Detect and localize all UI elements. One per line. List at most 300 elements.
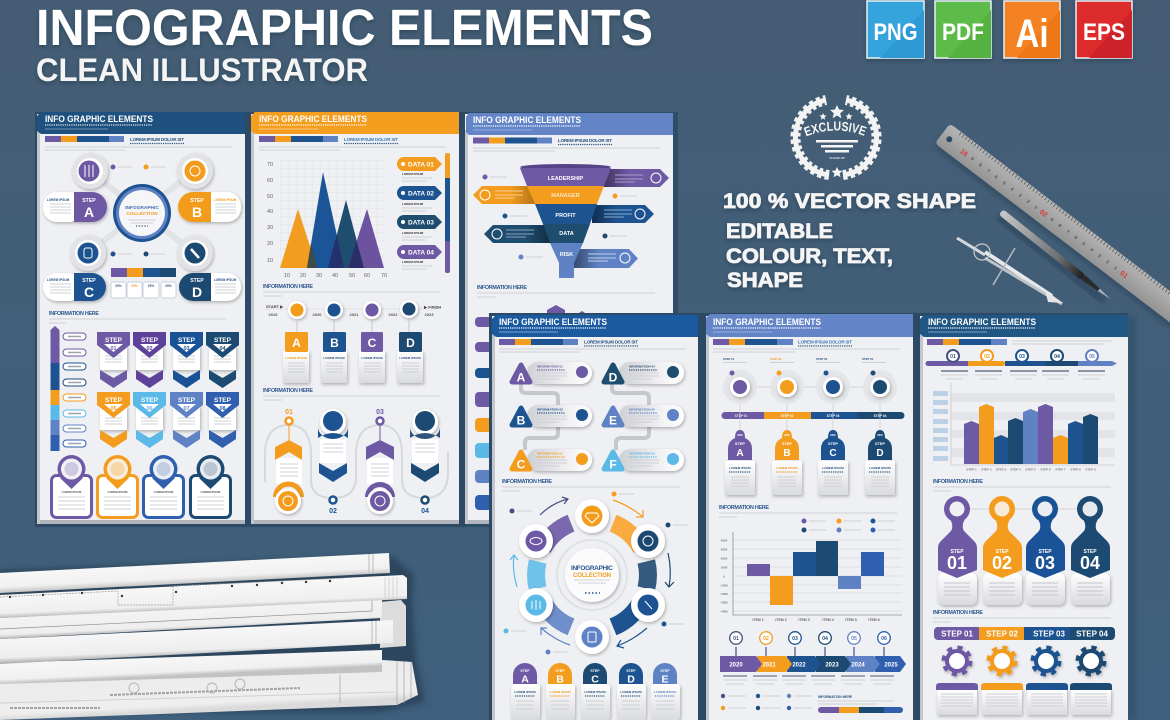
timeline with icons: 2021 bbox=[350, 312, 359, 317]
flow 02: 02 bbox=[329, 508, 337, 515]
connectors bbox=[521, 384, 649, 450]
year circles: 01 bbox=[733, 636, 739, 642]
tab D: D bbox=[627, 674, 635, 686]
year arrow band bbox=[720, 656, 906, 672]
gear dark bbox=[1078, 648, 1104, 674]
data 02 bbox=[397, 186, 442, 211]
timeline with icons bbox=[265, 300, 441, 332]
snake flow bbox=[265, 409, 448, 515]
positive negative bar chart: 1000 bbox=[721, 566, 728, 570]
heading: information here: INFORMATION HERE bbox=[502, 479, 552, 485]
ruler: 4 bbox=[1010, 186, 1015, 192]
tab B bbox=[546, 663, 575, 720]
ruler: 02 bbox=[1038, 209, 1048, 219]
year arrow band: 2022 bbox=[792, 662, 806, 668]
x axis labels: 40 bbox=[332, 273, 338, 279]
header bbox=[492, 315, 698, 337]
step cards row 2 bbox=[97, 392, 239, 448]
arrow bar chart: STEP 4 bbox=[1010, 468, 1021, 472]
x axis labels: 10 bbox=[284, 273, 290, 279]
row E: E bbox=[609, 414, 617, 428]
heading: information here: INFORMATION HERE bbox=[263, 284, 313, 290]
card C bbox=[359, 332, 385, 383]
positive negative bar chart: ITEM 5 bbox=[845, 618, 857, 622]
funnel bullets bbox=[482, 174, 637, 260]
tab C: LOREM IPSUM bbox=[584, 690, 606, 694]
funnel: LEADERSHIP bbox=[548, 176, 584, 182]
tag step 01: STEP bbox=[950, 549, 964, 555]
flow 02 bbox=[318, 409, 348, 515]
arrow bar chart: STEP 3 bbox=[996, 468, 1006, 472]
timeline with icons: 2019 bbox=[269, 312, 278, 317]
colour key: LOREM IPSUM DOLOR SIT bbox=[798, 340, 852, 344]
tab A: STEP bbox=[520, 669, 530, 673]
row B bbox=[512, 405, 592, 428]
step 05 bbox=[97, 392, 130, 448]
tag C: STEP bbox=[828, 442, 838, 446]
roll 6 bbox=[0, 660, 418, 720]
tab A: LOREM IPSUM bbox=[514, 690, 536, 694]
panel 4: process sheet bbox=[489, 313, 703, 720]
row C bbox=[512, 449, 592, 472]
row F bbox=[604, 449, 684, 472]
ruler: 5 bbox=[1002, 180, 1007, 186]
arrow: periwinkle bbox=[573, 249, 638, 268]
tag D bbox=[865, 430, 895, 495]
tag step 03: STEP bbox=[1038, 549, 1052, 555]
panel 6: step infographic sheet bbox=[917, 313, 1136, 720]
card D bbox=[397, 332, 423, 383]
cycle bullets bbox=[504, 492, 688, 654]
ruler: 5 bbox=[1081, 241, 1087, 247]
positive negative bar chart: ITEM 3 bbox=[798, 618, 810, 622]
tab E bbox=[651, 663, 680, 720]
flow 04: 04 bbox=[421, 508, 429, 515]
ruler: 7 bbox=[1065, 229, 1071, 235]
positive negative bar chart: ITEM 6 bbox=[868, 618, 880, 622]
top timeline: 03 bbox=[1019, 354, 1025, 360]
step 08: 08 bbox=[219, 406, 226, 412]
row B: INFORMATION 02 bbox=[537, 408, 563, 412]
data 02: DATA 02 bbox=[408, 190, 434, 198]
tag D: D bbox=[876, 448, 884, 459]
header: INFO GRAPHIC ELEMENTS bbox=[713, 317, 821, 328]
arrow: dark bbox=[484, 225, 552, 243]
step B: B bbox=[192, 204, 202, 220]
line: 100 % vector shape: 100 % VECTOR SHAPE bbox=[723, 190, 976, 213]
pin cards bbox=[52, 455, 230, 518]
top timeline: 02 bbox=[984, 354, 990, 360]
y axis labels: 70 bbox=[267, 162, 273, 168]
year arrow band: 2024 bbox=[851, 662, 865, 668]
left tabs bbox=[475, 317, 492, 510]
header bbox=[37, 112, 245, 134]
tab A bbox=[511, 663, 540, 720]
year circles: 05 bbox=[851, 636, 857, 642]
arrow bar chart: STEP 7 bbox=[1055, 468, 1066, 472]
gear caption cards bbox=[936, 683, 1112, 715]
tag B: LOREM IPSUM bbox=[776, 466, 798, 470]
tag B bbox=[772, 430, 802, 495]
badge: EPS bbox=[1076, 1, 1132, 58]
heading: information here: INFORMATION HERE bbox=[49, 311, 99, 317]
ruler: 2 bbox=[1105, 259, 1111, 265]
tab D: LOREM IPSUM bbox=[620, 690, 642, 694]
legend bullets bbox=[110, 164, 165, 256]
step 05: STEP bbox=[105, 397, 123, 404]
funnel: PROFIT bbox=[555, 213, 576, 219]
tab C bbox=[581, 663, 610, 720]
arrow bar chart: STEP 2 bbox=[981, 468, 992, 472]
heading: information here 2 bbox=[933, 610, 1111, 622]
step A: LOREM IPSUM bbox=[47, 198, 70, 202]
card A: LOREM IPSUM bbox=[285, 356, 307, 360]
heading: information here 2: INFORMATION HERE bbox=[263, 388, 313, 394]
pin card orange bbox=[98, 455, 138, 518]
top timeline: 05 bbox=[1089, 354, 1095, 360]
central hub bbox=[70, 153, 213, 271]
badge: PNG bbox=[867, 1, 924, 58]
step tags bbox=[725, 430, 895, 495]
sub heading: CLEAN ILLUSTRATOR bbox=[36, 52, 368, 88]
tab C: STEP bbox=[590, 669, 600, 673]
line: colour text: COLOUR, TEXT, bbox=[726, 245, 893, 268]
positive negative bar chart: ITEM 4 bbox=[822, 618, 834, 622]
header: INFO GRAPHIC ELEMENTS bbox=[259, 114, 367, 125]
data 02: LOREM IPSUM bbox=[402, 202, 424, 206]
triangles bbox=[280, 172, 384, 268]
top timeline: 01 bbox=[950, 354, 956, 360]
arrow: blue bbox=[592, 205, 654, 223]
triangle chart bbox=[267, 156, 387, 279]
ruler: 9 bbox=[1049, 217, 1055, 222]
row D: D bbox=[609, 370, 618, 384]
stars bbox=[819, 105, 852, 177]
data 01: LOREM IPSUM bbox=[402, 172, 424, 176]
positive negative bar chart bbox=[720, 532, 902, 622]
letter cards bbox=[283, 332, 423, 383]
badge: PDF bbox=[935, 1, 991, 58]
colour key bbox=[499, 339, 686, 352]
positive negative bar chart: 3000 bbox=[721, 548, 728, 552]
step 06: 06 bbox=[146, 406, 153, 412]
pin card blue bbox=[144, 455, 184, 518]
row F: F bbox=[609, 458, 617, 472]
tag B: B bbox=[783, 448, 791, 459]
header: INFO GRAPHIC ELEMENTS bbox=[473, 115, 581, 126]
gear orange bbox=[989, 648, 1015, 674]
step 04: STEP bbox=[214, 337, 232, 344]
roll 2 bbox=[0, 575, 407, 618]
step 02: 02 bbox=[146, 346, 153, 352]
panel 5: bar chart sheet bbox=[703, 313, 917, 720]
tag C: LOREM IPSUM bbox=[822, 466, 844, 470]
shadow bbox=[0, 556, 425, 712]
funnel: RISK bbox=[560, 252, 573, 258]
ruler: 8 bbox=[978, 162, 983, 168]
step 05: 05 bbox=[110, 406, 117, 412]
tag A: A bbox=[736, 448, 744, 459]
card A bbox=[283, 332, 309, 383]
cycle arrows bbox=[510, 497, 674, 648]
gear blue bbox=[1033, 648, 1059, 674]
nodes bbox=[519, 499, 665, 654]
ruler: 4 bbox=[1089, 247, 1095, 253]
positive negative bar chart: -2000 bbox=[720, 592, 728, 596]
small percent bar: 20% bbox=[165, 284, 172, 288]
caption 4 bbox=[1070, 683, 1112, 715]
flow 03: 03 bbox=[376, 409, 384, 416]
data 03: LOREM IPSUM bbox=[402, 231, 424, 235]
tab D: STEP bbox=[626, 669, 636, 673]
row F: INFORMATION 06 bbox=[629, 452, 655, 456]
heading: information here bbox=[263, 284, 440, 296]
tag A: 20% bbox=[737, 433, 743, 437]
year arrow band: 2025 bbox=[884, 662, 898, 668]
ring segments bbox=[536, 523, 648, 627]
funnel: DATA bbox=[559, 231, 574, 237]
card B: LOREM IPSUM bbox=[323, 356, 345, 360]
step C bbox=[43, 273, 106, 301]
funnel bbox=[520, 164, 611, 278]
ring steps: STEP 04 bbox=[862, 357, 874, 361]
heading: information here: INFORMATION HERE bbox=[719, 505, 769, 511]
badge: EPS: EPS bbox=[1083, 19, 1125, 46]
colour key: LOREM IPSUM DOLOR SIT bbox=[584, 340, 638, 344]
card C: LOREM IPSUM bbox=[361, 356, 383, 360]
heading: information here 2 bbox=[263, 388, 440, 400]
panel 1: step diagram sheet bbox=[35, 112, 250, 527]
pin card blue: LOREM IPSUM bbox=[154, 490, 174, 494]
ruler: 8 bbox=[1057, 223, 1063, 229]
y axis labels: 10 bbox=[267, 258, 273, 264]
positive negative bar chart: 2000 bbox=[721, 556, 728, 560]
top timeline bbox=[926, 350, 1117, 379]
step bar: STEP 03 bbox=[827, 414, 840, 418]
year circles: 02 bbox=[763, 636, 769, 642]
tab C: C bbox=[591, 674, 599, 686]
card B bbox=[321, 332, 347, 383]
year arrow band: 2020 bbox=[729, 662, 743, 668]
ring steps bbox=[723, 357, 897, 404]
x axis labels: 60 bbox=[364, 273, 370, 279]
timeline with icons: ▶ FINISH bbox=[423, 304, 441, 310]
row D bbox=[604, 362, 684, 384]
year captions bbox=[723, 676, 894, 684]
heading: information here: INFORMATION HERE bbox=[933, 479, 983, 485]
row E: INFORMATION 05 bbox=[629, 408, 655, 412]
tab E: STEP bbox=[660, 669, 670, 673]
step bar: STEP 02 bbox=[781, 414, 794, 418]
gears bbox=[944, 648, 1104, 674]
hub circle: COLLECTION bbox=[126, 211, 158, 217]
heading: information here bbox=[719, 505, 897, 517]
tab E: E bbox=[661, 674, 669, 686]
circular cycle diagram bbox=[504, 492, 688, 654]
arrow bar chart: STEP 9 bbox=[1085, 468, 1096, 472]
year circles: 04 bbox=[822, 636, 828, 642]
card D: LOREM IPSUM bbox=[399, 356, 421, 360]
vector shape text bbox=[723, 190, 976, 292]
step band: STEP 01 bbox=[941, 630, 973, 638]
positive negative bar chart: 0 bbox=[723, 574, 725, 578]
ruler: 1 bbox=[1034, 205, 1039, 210]
file format badges bbox=[867, 1, 1132, 58]
info rows bbox=[512, 362, 684, 472]
step A: A bbox=[84, 204, 94, 220]
header bbox=[706, 314, 913, 337]
pin card dark: LOREM IPSUM bbox=[201, 490, 221, 494]
positive negative bar chart: -3000 bbox=[720, 600, 728, 604]
y axis labels: 20 bbox=[267, 241, 273, 247]
badge: Ai: Ai bbox=[1016, 12, 1048, 56]
blueprint rolls bbox=[0, 553, 425, 720]
colour key bbox=[927, 339, 1112, 345]
badge stripes bbox=[816, 140, 858, 152]
ruler: 1 bbox=[1113, 265, 1119, 271]
y axis labels: 50 bbox=[267, 194, 273, 200]
tag step 02: STEP bbox=[995, 549, 1009, 555]
card D: D bbox=[406, 336, 415, 350]
small percent bar: 20% bbox=[148, 284, 154, 288]
timeline with icons: 2020 bbox=[313, 312, 322, 317]
colour key: LOREM IPSUM DOLOR SIT bbox=[558, 138, 612, 143]
step 07: STEP bbox=[178, 397, 196, 404]
ruler: 3 bbox=[1018, 192, 1023, 198]
colour key bbox=[713, 339, 900, 352]
ruler: 7 bbox=[986, 168, 991, 174]
ring steps: STEP 02 bbox=[770, 357, 782, 361]
node: dark bbox=[177, 235, 213, 271]
panel 2: chart sheet bbox=[249, 112, 465, 527]
positive negative bar chart: ITEM 2 bbox=[775, 618, 787, 622]
step 04 bbox=[206, 332, 239, 388]
big step tags bbox=[938, 496, 1110, 605]
row B: B bbox=[517, 414, 526, 428]
caption 3 bbox=[1026, 683, 1068, 715]
arrow bar chart: STEP 6 bbox=[1040, 468, 1051, 472]
header bbox=[251, 112, 459, 134]
tag A: LOREM IPSUM bbox=[729, 466, 751, 470]
data tags bbox=[397, 157, 442, 269]
row C: C bbox=[517, 458, 526, 472]
node icons bbox=[530, 513, 653, 642]
caption 1 bbox=[936, 683, 978, 715]
ring steps: STEP 03 bbox=[816, 357, 828, 361]
step bar: STEP 04 bbox=[874, 414, 887, 418]
tab D bbox=[617, 663, 646, 720]
ruler: 2 bbox=[1026, 198, 1031, 204]
tag C: C bbox=[829, 448, 837, 459]
ruler: 3 bbox=[1097, 253, 1103, 259]
step 03 bbox=[170, 332, 203, 388]
step 01: STEP bbox=[105, 337, 123, 344]
card C: C bbox=[368, 336, 377, 350]
back sheet ends bbox=[380, 600, 406, 648]
tab B: LOREM IPSUM bbox=[549, 690, 571, 694]
arrow bar chart bbox=[933, 383, 1115, 472]
x axis labels: 30 bbox=[316, 273, 322, 279]
arrow bar chart: STEP 5 bbox=[1025, 468, 1036, 472]
ring steps: STEP 01 bbox=[723, 357, 735, 361]
node: orange bbox=[177, 153, 213, 189]
flow 01 bbox=[273, 409, 304, 514]
tag step 01 bbox=[938, 496, 977, 605]
tag step 02: 02 bbox=[992, 553, 1012, 573]
step D bbox=[179, 273, 241, 301]
gear purple bbox=[944, 648, 970, 674]
year arrow band: 2021 bbox=[762, 662, 776, 668]
step D: STEP bbox=[190, 278, 204, 284]
colour key: LOREM IPSUM DOLOR SIT bbox=[130, 137, 184, 142]
step B: LOREM IPSUM bbox=[214, 198, 237, 202]
year circles: 03 bbox=[792, 636, 798, 642]
step cards row 1 bbox=[97, 332, 239, 388]
positive negative bar chart: -1000 bbox=[720, 584, 728, 588]
ruler: 16 bbox=[958, 148, 969, 159]
positive negative bar chart: ITEM 1 bbox=[752, 618, 764, 622]
arrow bar chart: STEP 8 bbox=[1070, 468, 1081, 472]
arrow: purple bbox=[602, 169, 669, 187]
step A bbox=[43, 192, 107, 222]
flow 03 bbox=[365, 409, 395, 514]
step C: C bbox=[84, 284, 94, 300]
year circles bbox=[730, 632, 890, 656]
step 06 bbox=[133, 392, 166, 448]
step 07: 07 bbox=[183, 406, 190, 412]
tag B: 20% bbox=[784, 433, 790, 437]
badge: PNG: PNG bbox=[874, 19, 918, 46]
flow 01: 01 bbox=[285, 409, 293, 416]
colour key bbox=[45, 136, 232, 150]
tag D: STEP bbox=[875, 442, 885, 446]
tag step 04: 04 bbox=[1080, 553, 1100, 573]
tab E: LOREM IPSUM bbox=[654, 690, 676, 694]
data 04: LOREM IPSUM bbox=[402, 260, 424, 264]
footer info bbox=[818, 695, 903, 713]
node: purple bbox=[72, 153, 108, 189]
colour key bbox=[473, 138, 660, 151]
step bar bbox=[722, 404, 905, 430]
compass bbox=[957, 238, 1063, 304]
heading: information here bbox=[49, 311, 226, 323]
tab B: B bbox=[556, 674, 564, 686]
step C: STEP bbox=[82, 278, 96, 284]
tag A: STEP bbox=[735, 442, 745, 446]
step band: STEP 03 bbox=[1033, 630, 1065, 638]
tag B: STEP bbox=[782, 442, 792, 446]
bottom step tabs bbox=[511, 663, 680, 720]
flow 04 bbox=[410, 409, 440, 515]
year circles: 06 bbox=[881, 636, 887, 642]
step C: LOREM IPSUM bbox=[47, 278, 70, 282]
header bbox=[920, 315, 1128, 337]
year arrow band: 2023 bbox=[825, 662, 839, 668]
badge: Ai bbox=[1004, 1, 1060, 58]
row A: A bbox=[517, 370, 526, 384]
pen bbox=[995, 209, 1113, 306]
small percent bar: 20% bbox=[131, 284, 138, 288]
tag step 02 bbox=[983, 496, 1022, 605]
step 04: 04 bbox=[219, 346, 226, 352]
card A: A bbox=[292, 336, 301, 350]
step D: LOREM IPSUM bbox=[214, 278, 237, 282]
positive negative bar chart: -4000 bbox=[720, 610, 728, 614]
step 03: STEP bbox=[178, 337, 196, 344]
positive negative bar chart: 4000 bbox=[721, 538, 728, 542]
row D: INFORMATION 04 bbox=[629, 364, 655, 368]
header bbox=[466, 113, 673, 135]
